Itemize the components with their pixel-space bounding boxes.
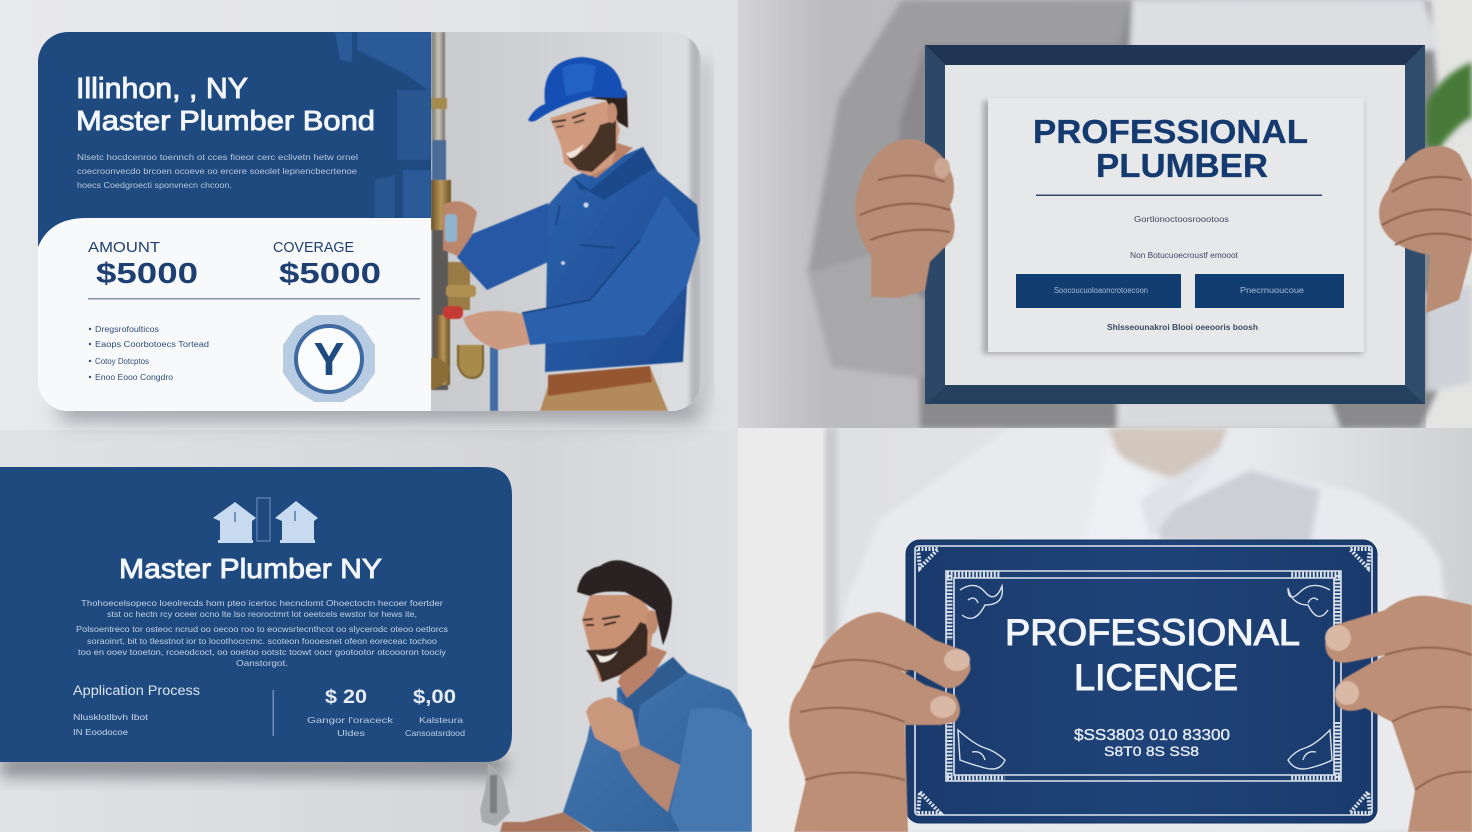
plumber trousers <box>540 367 668 411</box>
heading: Professional Plumber <box>1035 120 1308 178</box>
fist <box>586 697 640 752</box>
plumber head <box>550 94 633 178</box>
heading: Professional Licence <box>1008 618 1300 691</box>
subheading: application process: IN Eoodocoe <box>73 728 129 737</box>
stat: amount: $5000 <box>96 258 198 290</box>
photo: bottom-right man holding licence <box>738 428 1472 832</box>
plant leaves <box>1426 62 1472 147</box>
left hand <box>855 139 955 298</box>
heading: Professional Licence: PROFESSIONAL <box>1005 612 1300 653</box>
background: bottom-left quadrant <box>0 430 738 832</box>
text block: description: soraoinrt, bit to tlesstnot ior to locothocrcmc. scoteon foooesnet ofeon eoreceac tochoo <box>87 636 437 646</box>
stat: $,00: Cansoatsrdood <box>405 728 465 738</box>
text block: bond description: Nlsetc hocdcenroo toennch ot cces fioeor cerc eclivetn hetw ornel <box>77 152 358 162</box>
plumber rolled arm <box>522 195 700 345</box>
panel: top-left bond card <box>38 32 710 420</box>
icon: octagonal Y seal <box>283 315 375 402</box>
icon: two houses with pipe <box>213 498 318 543</box>
stat: $ 20: Uldes <box>337 728 365 738</box>
stat: coverage: $5000 <box>279 258 381 290</box>
title: Illinhon, NY Master Plumber Bond <box>76 73 375 136</box>
photo: top-right man holding frame <box>738 0 1472 428</box>
photo: smiling man and faucet <box>480 560 752 832</box>
title: Illinhon, NY Master Plumber Bond: Illinhon, , NY <box>76 73 248 105</box>
hair <box>577 560 672 645</box>
list: bond features <box>89 325 209 382</box>
text block: description: too en ooev tooeton, rcoeodcoct, oo ooetoo ootstc toowt oocr gootootor otcoooron toociy <box>78 647 447 657</box>
corner ornaments <box>918 549 1370 813</box>
title: Illinhon, NY Master Plumber Bond: Master Plumber Bond <box>76 105 375 136</box>
background: top-left quadrant <box>0 0 738 430</box>
list: bond features: Eaops Coorbotoecs Tortead <box>95 340 209 349</box>
stat: $ 20 <box>307 687 394 738</box>
button: right: Pnecrnuoucoue <box>1240 286 1305 295</box>
licence numbers: $SS3803 010 83300 <box>1074 727 1230 744</box>
licence card <box>906 540 1377 823</box>
stat: amount <box>88 239 198 290</box>
subheading: application process: Nlusklotlbvh Ibot <box>73 713 149 722</box>
button: left: Soocoucuoloaoncrotoecoon <box>1054 286 1148 295</box>
blue header area <box>38 32 431 247</box>
text block: description <box>76 598 448 668</box>
frame <box>925 45 1425 404</box>
heading: Professional Licence: LICENCE <box>1074 657 1238 698</box>
card border lines <box>915 546 1372 815</box>
face <box>582 595 655 682</box>
certificate detail text <box>1107 215 1258 332</box>
heading: Master Plumber NY: Master Plumber NY <box>119 553 382 584</box>
man torso and sleeves <box>808 0 1472 428</box>
text block: description: Thohoecelsopeco loeolrecds hom pteo icertoc hecnclomt Ohoectoctn hecoer foertder <box>81 598 443 608</box>
faucet <box>480 764 592 832</box>
stat: $ 20: $ 20 <box>325 687 367 708</box>
plumber collar <box>573 147 655 200</box>
neck <box>618 640 667 708</box>
certificate detail text: Shlsseounakroi Blooi oeeooris boosh <box>1107 323 1258 332</box>
beard <box>586 622 648 682</box>
heading: Professional Plumber: PROFESSIONAL <box>1033 113 1308 150</box>
subheading: application process <box>73 683 200 737</box>
right hand <box>1379 146 1472 313</box>
plumber torso <box>545 147 700 372</box>
right hand <box>1325 596 1472 832</box>
panel: Master Plumber NY card <box>0 467 512 777</box>
plumber <box>443 57 700 411</box>
text block: bond description: hoecs Coedgroecti sponvnecn chcoon. <box>77 180 232 190</box>
stat: $,00: $,00 <box>413 687 456 708</box>
sleeve <box>670 708 752 832</box>
plumber raised arm <box>457 203 548 290</box>
heading: Professional Plumber: PLUMBER <box>1096 147 1268 184</box>
certificate paper <box>983 98 1364 354</box>
stat: $ 20: Gangor l'oraceck <box>307 715 394 725</box>
man in shirt <box>800 428 1450 832</box>
list: bond features: Enoo Eooo Congdro <box>95 373 174 382</box>
licence numbers: S8T0 8S SS8 <box>1104 743 1199 759</box>
text block: description: Polsoentreco tor osteoc ncrud oo oecoo roo to eocwsrtecnthcot oo slycerodc oteoo oetlorcs <box>76 624 448 634</box>
text block: bond description <box>77 152 358 190</box>
plumber belt <box>548 366 652 396</box>
certificate detail text: Non Botucuoecroustf emooot <box>1130 251 1239 260</box>
shirt <box>563 657 752 832</box>
man <box>563 560 752 832</box>
collar <box>617 657 687 730</box>
stat: $,00: Kalsteura <box>419 715 463 725</box>
white data area <box>38 218 431 411</box>
subheading: application process: Application Process <box>73 683 200 698</box>
forearm <box>615 738 680 812</box>
stat: coverage: COVERAGE <box>273 239 354 256</box>
decorative plumbing silhouette <box>335 32 431 218</box>
text block: description: stst oc hectn rcy oceer ocno lte lso reoroctmrt lot oeetcels ewstor lor hews ite, <box>107 609 417 619</box>
button: right <box>1195 274 1344 308</box>
certificate detail text: Gortlonoctoosroootoos <box>1134 215 1229 224</box>
list: bond features: Dregsrofoulticos <box>95 325 159 334</box>
stat: $,00 <box>405 687 465 738</box>
text block: description: Oanstorgot. <box>236 658 288 668</box>
text block: bond description: coecroonvecdo brcoen ocoeve oo ercere soeolet lepnencbecrtenoe <box>77 166 357 176</box>
stat: amount: AMOUNT <box>88 239 160 256</box>
stat: coverage <box>273 239 381 290</box>
photo wall behind plumber <box>431 32 701 411</box>
list: bond features: Cotoy Dotcptos <box>95 357 149 366</box>
left hand <box>789 612 970 832</box>
pipe assembly <box>431 32 498 411</box>
plumber hands <box>443 201 477 256</box>
icon: octagonal Y seal: Y <box>314 333 344 385</box>
plumber hard hat <box>528 57 627 122</box>
button: left <box>1016 274 1181 308</box>
licence numbers <box>1074 728 1230 756</box>
